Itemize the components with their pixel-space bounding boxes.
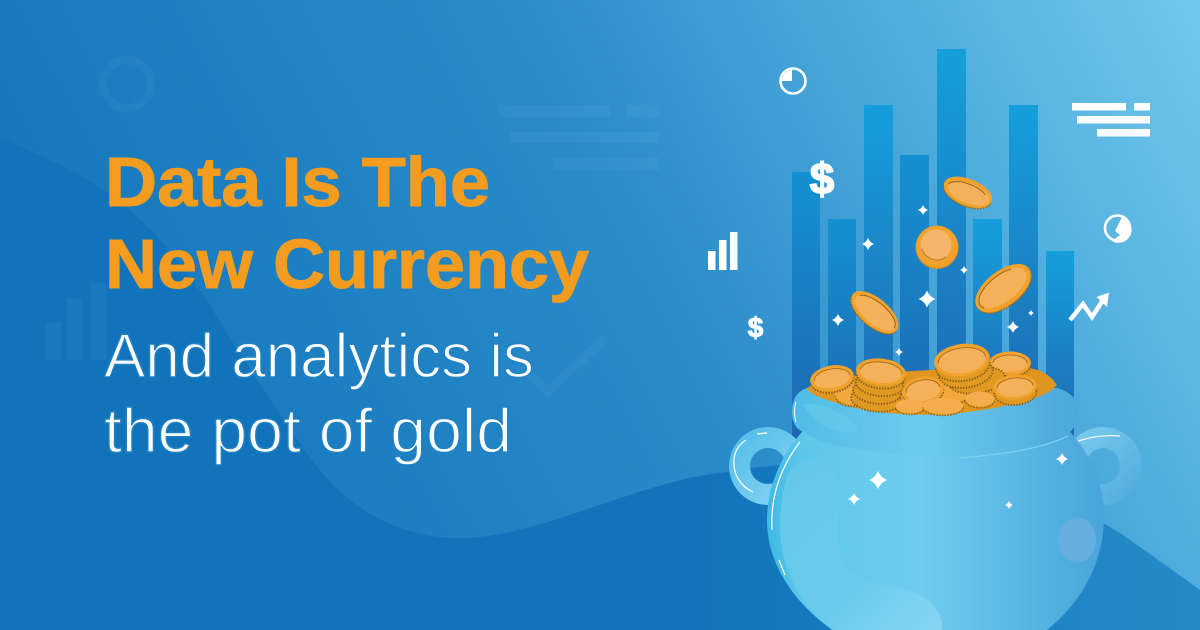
icon: large dollar: $ bbox=[810, 155, 834, 204]
coin: small right bbox=[966, 392, 994, 408]
icon: trend arrow bbox=[1070, 292, 1109, 320]
subtitle: And analytics is bbox=[104, 322, 534, 391]
pot shine lines bbox=[772, 442, 800, 575]
coin: small left bbox=[896, 399, 924, 414]
title bbox=[105, 143, 589, 303]
icon: small dollar: $ bbox=[748, 312, 764, 343]
background wave bbox=[0, 138, 1200, 630]
subtitle: the pot of gold bbox=[104, 397, 512, 466]
coin: middle behind bbox=[931, 384, 969, 404]
ghost lines icon bbox=[499, 105, 659, 170]
title: New Currency bbox=[105, 225, 589, 303]
icon: mini bars bbox=[708, 232, 738, 270]
icon: falling coin one bbox=[939, 170, 997, 215]
ghost bars icon bbox=[45, 283, 106, 360]
pot spot bbox=[1058, 518, 1096, 562]
coin pile bbox=[808, 339, 1038, 416]
ghost pie icon bbox=[99, 56, 155, 112]
icon: lines bbox=[1072, 103, 1150, 136]
coin: right front bbox=[992, 373, 1038, 407]
panel: pot body bbox=[767, 428, 1104, 630]
panel: pot rim bbox=[792, 388, 1079, 458]
icon: pie chart right bbox=[1105, 216, 1132, 243]
icon: right pot handle bbox=[1064, 427, 1142, 505]
ghost icons bbox=[45, 56, 659, 392]
subtitle bbox=[104, 322, 534, 466]
icon: falling coin three bbox=[967, 255, 1040, 323]
icon: sparkles bbox=[832, 205, 1034, 356]
panel: gold in pot bbox=[807, 339, 1057, 416]
title: Data Is The bbox=[105, 143, 490, 221]
coin stack: left bbox=[850, 356, 907, 414]
pot left highlight bbox=[780, 460, 942, 630]
coin stack: centre tall bbox=[932, 339, 1006, 399]
icon: pie chart top bbox=[780, 68, 806, 94]
pot sparkles bbox=[848, 453, 1068, 509]
coin: centre front bbox=[900, 373, 946, 409]
icon: left pot handle bbox=[729, 427, 807, 505]
coin: behind left stack bbox=[835, 384, 871, 406]
icon: falling coin four bbox=[844, 283, 906, 342]
coin: left top bbox=[808, 362, 856, 396]
ghost arrow icon bbox=[522, 337, 606, 392]
coin: small middle bbox=[922, 398, 964, 416]
coin: back right bbox=[989, 352, 1031, 376]
bar chart bbox=[792, 49, 1074, 442]
icon: falling coin two bbox=[916, 226, 958, 269]
